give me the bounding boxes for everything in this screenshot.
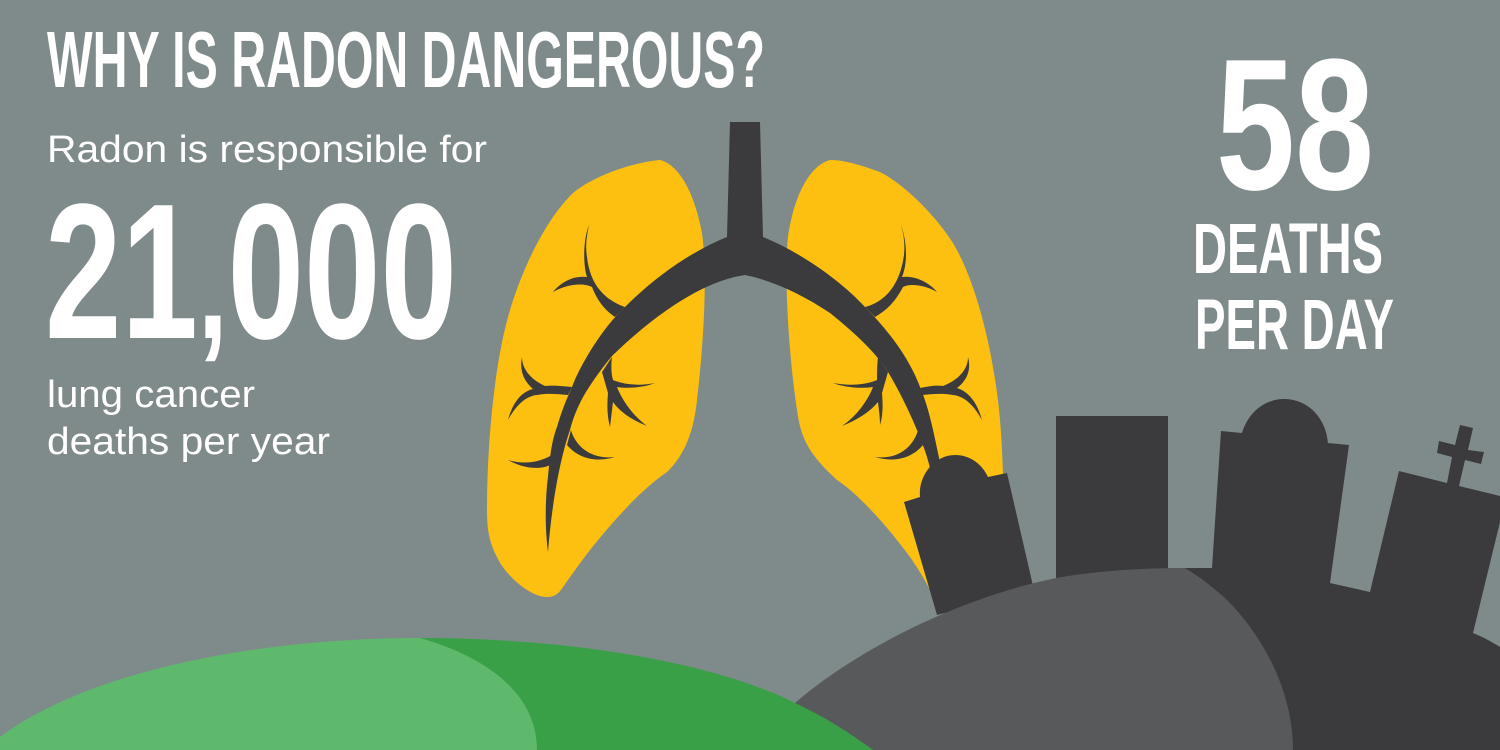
trachea and bronchi <box>546 122 940 552</box>
green hill: dark side <box>420 638 873 750</box>
text: lung cancer deaths per year: deaths per year <box>47 421 330 463</box>
big number: 21,000: 21,000 <box>45 163 457 379</box>
text: lung cancer deaths per year: lung cancer <box>47 374 255 416</box>
lungs <box>487 122 1003 600</box>
gravestones <box>904 416 1168 615</box>
right lung <box>786 160 1003 600</box>
green hill <box>0 638 873 750</box>
gravestone: leaning left <box>904 455 1034 615</box>
left lung <box>487 160 705 597</box>
title: WHY IS RADON DANGEROUS? <box>47 15 765 104</box>
green hill: light side <box>0 638 537 750</box>
grey hill <box>700 568 1293 750</box>
text: deaths per day <box>1193 210 1394 365</box>
left bronchioles <box>508 225 655 468</box>
text: lung cancer deaths per year <box>47 374 330 463</box>
text: deaths per day: PER DAY <box>1195 286 1394 365</box>
right bronchioles <box>833 225 982 460</box>
gravestone: rectangular <box>1056 416 1168 591</box>
big number: 58: 58 <box>1216 20 1374 229</box>
text: deaths per day: DEATHS <box>1193 210 1383 289</box>
dark hill with gravestones <box>1170 399 1500 750</box>
text: intro: Radon is responsible for <box>47 129 487 171</box>
